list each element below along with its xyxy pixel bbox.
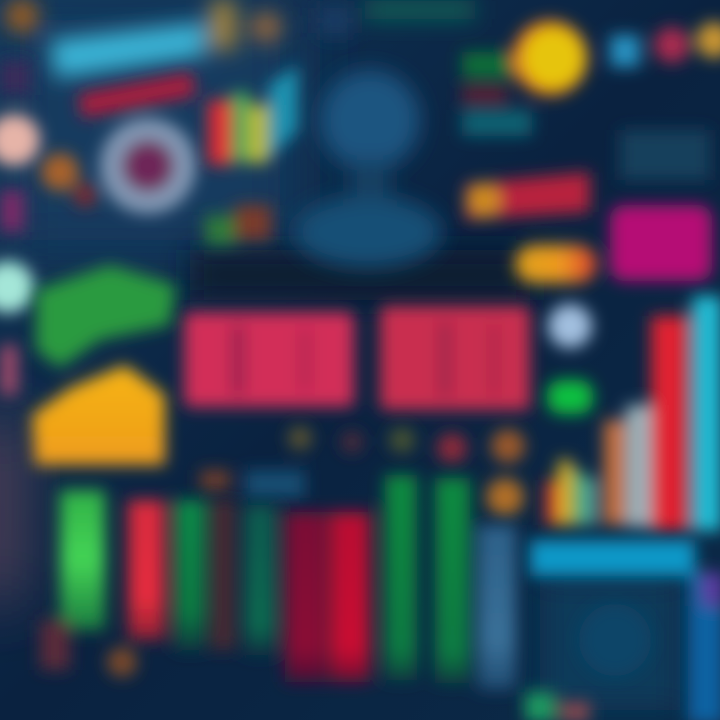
row of small dots xyxy=(200,426,525,516)
panel: green and yellow map shapes xyxy=(32,265,176,465)
panel: donut chart xyxy=(41,72,196,207)
panel: right legend dots xyxy=(547,304,593,414)
icon: left edge dots xyxy=(0,60,40,395)
icon: person silhouette xyxy=(294,70,442,268)
heading: large red title blocks xyxy=(184,306,530,410)
rainbow chart xyxy=(205,65,298,245)
panel: mid right pills xyxy=(465,172,712,283)
bar chart: lower columns xyxy=(40,475,516,690)
panel: top left header bars xyxy=(6,0,475,78)
panel: top right circles xyxy=(462,20,720,180)
panel: lower right banner xyxy=(525,540,720,720)
bar chart: right side xyxy=(545,296,720,531)
